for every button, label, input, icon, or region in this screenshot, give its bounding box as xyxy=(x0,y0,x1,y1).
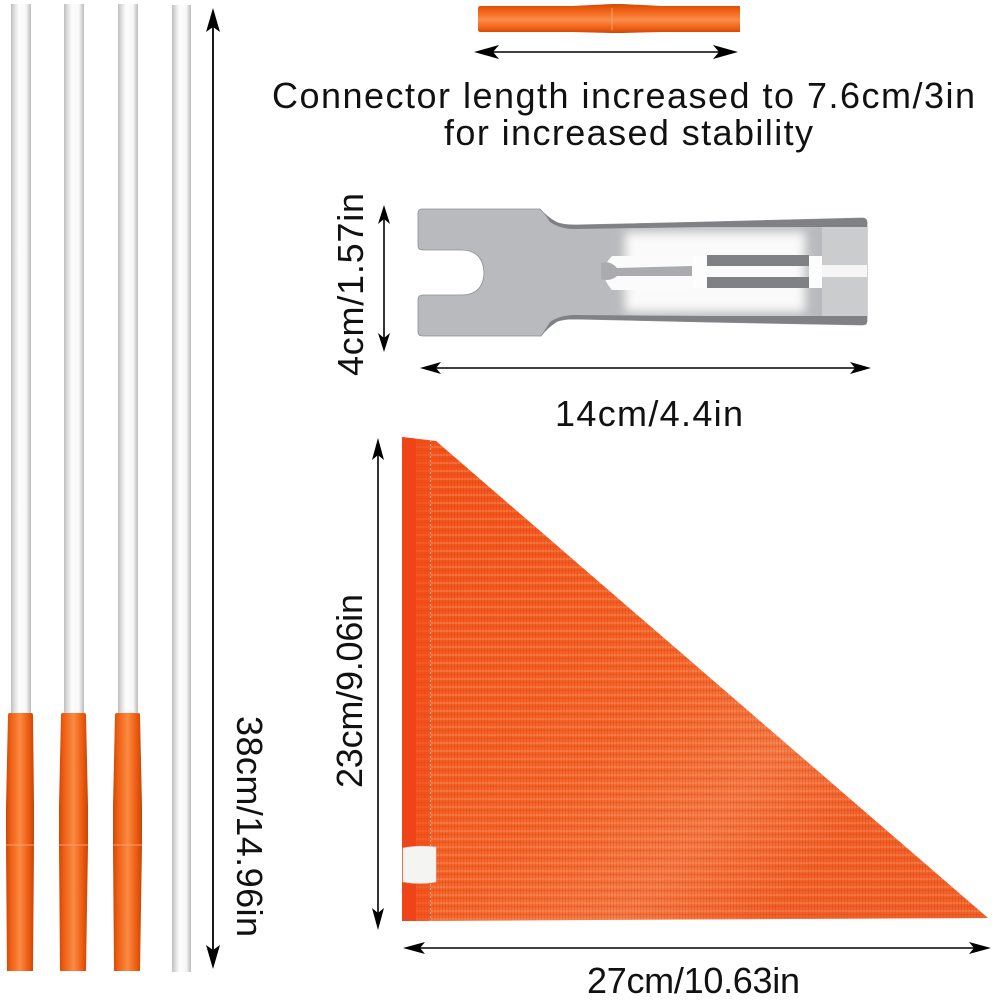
rod 4 plain white xyxy=(172,5,191,972)
flag sleeve xyxy=(402,437,430,921)
label: flag width: 27cm/10.63in xyxy=(587,960,800,1000)
arrow: connector length xyxy=(474,45,738,59)
label: flag height: 23cm/9.06in xyxy=(329,594,370,788)
rod 2 with orange connector xyxy=(59,4,88,971)
rod 3 with orange connector xyxy=(113,4,142,971)
bracket bottom rail xyxy=(541,315,867,336)
bracket slot xyxy=(604,256,692,290)
bracket right end xyxy=(822,226,868,318)
icon: orange connector xyxy=(478,4,740,33)
arrow: flag height xyxy=(372,438,384,930)
icon: metal bracket xyxy=(418,209,868,336)
rod 1 with orange connector xyxy=(6,4,34,971)
icon: orange triangular flag xyxy=(400,435,990,925)
flag white strap xyxy=(403,846,436,884)
bracket bright area xyxy=(625,232,805,312)
bracket latch xyxy=(693,255,822,288)
heading: connector note: for increased stability xyxy=(444,112,813,153)
label: bracket height: 4cm/1.57in xyxy=(330,193,371,376)
arrow: rod length xyxy=(206,8,220,969)
bracket top rail xyxy=(544,214,867,229)
heading: connector note: Connector length increased to 7.6cm/3in xyxy=(272,75,975,116)
arrow: bracket height xyxy=(378,205,390,352)
heading: connector note xyxy=(272,75,975,153)
arrow: flag width xyxy=(403,942,991,954)
arrow: bracket length xyxy=(420,362,871,374)
label: rod length: 38cm/14.96in xyxy=(229,716,270,937)
label: bracket length: 14cm/4.4in xyxy=(555,393,743,434)
